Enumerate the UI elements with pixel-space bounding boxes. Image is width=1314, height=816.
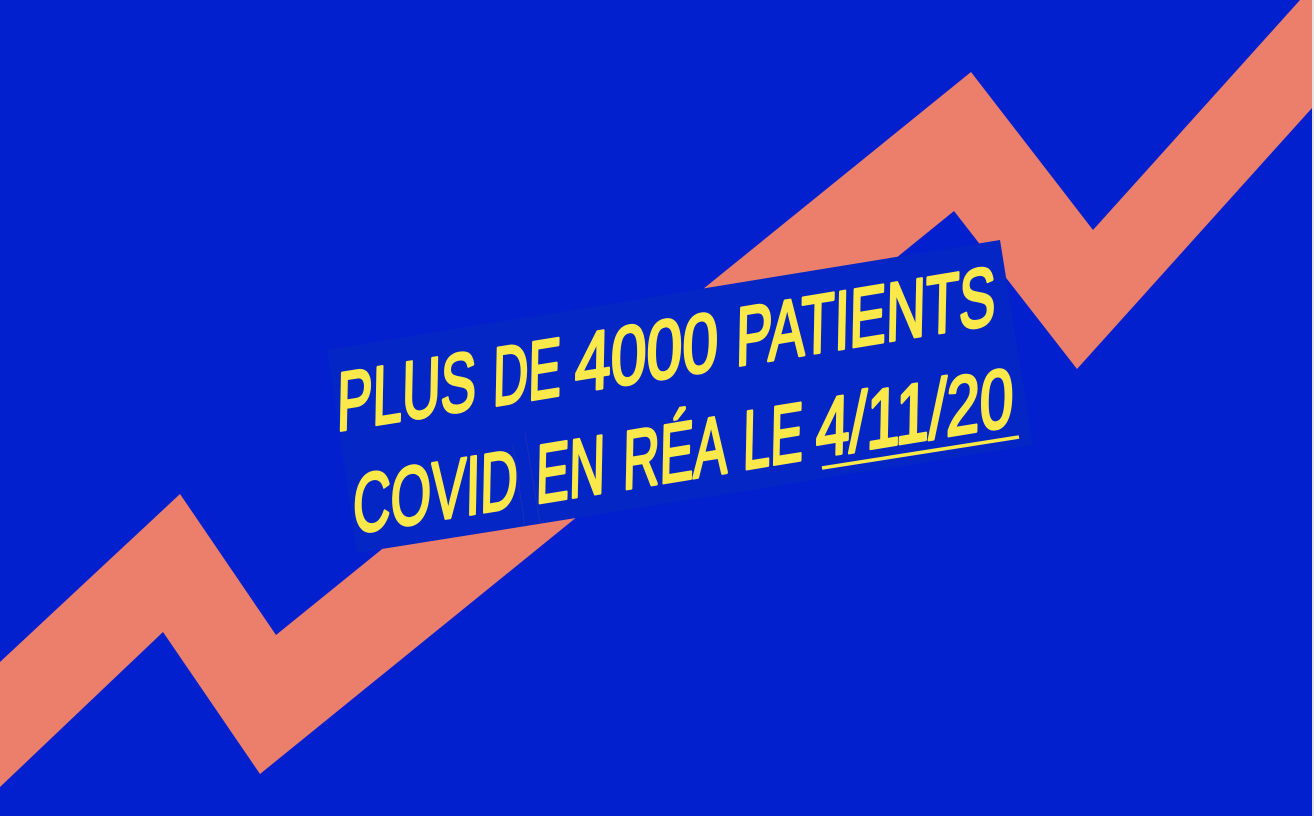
headline line 2: COVID (352, 432, 519, 551)
headline line 1 (336, 249, 997, 449)
headline line 2 (352, 385, 804, 551)
date underline (822, 437, 1019, 468)
headline line 1: PATIENTS (735, 249, 997, 384)
headline line 2: LE (742, 385, 804, 487)
headline line 1: PLUS (336, 333, 477, 449)
headline line 2: RÉA (622, 397, 729, 507)
headline line 1: 4000 (574, 294, 719, 410)
headline line 2: EN (535, 417, 606, 521)
headline panel (327, 240, 1033, 553)
date: 4/11/20 (815, 350, 1014, 475)
headline line 1: DE (492, 320, 562, 424)
